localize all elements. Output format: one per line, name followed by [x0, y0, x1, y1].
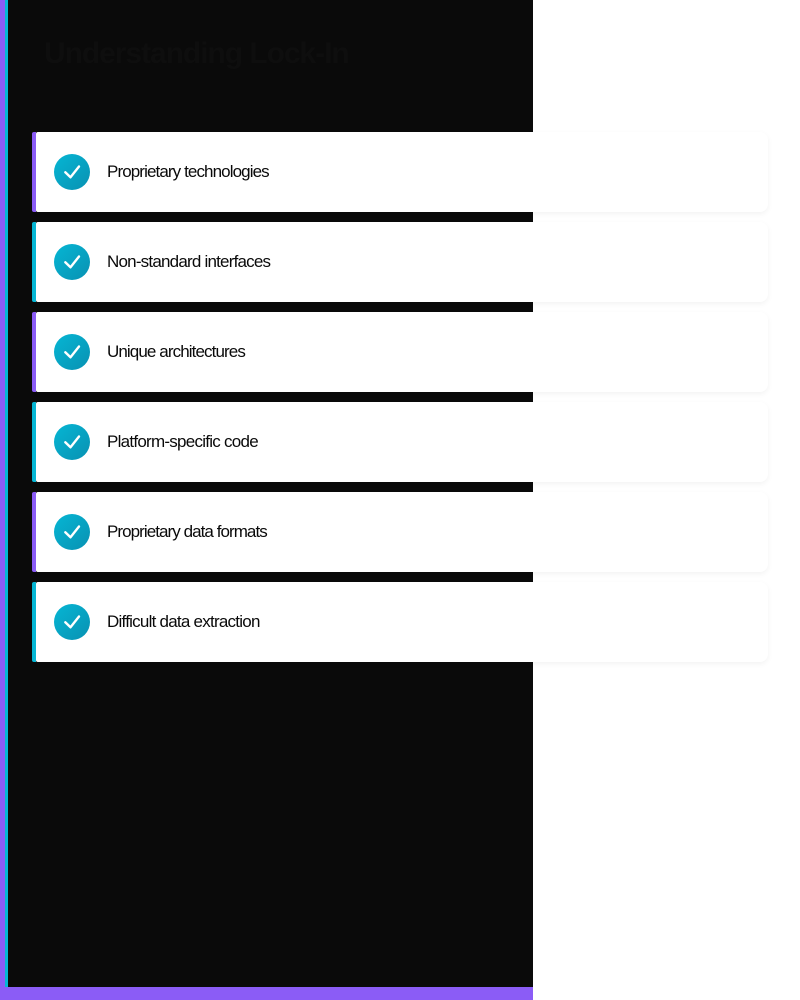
label: Difficult data extraction [107, 612, 260, 631]
card: unique architectures [32, 312, 760, 392]
label: Unique architectures [107, 342, 245, 361]
icon: check [54, 334, 90, 370]
icon: check [54, 244, 90, 280]
label: Proprietary data formats [107, 522, 267, 541]
card: proprietary data formats [32, 492, 760, 572]
icon: check [54, 604, 90, 640]
card: non-standard interfaces [32, 222, 760, 302]
bottom accent bar [0, 987, 533, 1000]
icon: check [54, 424, 90, 460]
icon: check [54, 154, 90, 190]
label: Platform-specific code [107, 432, 258, 451]
left accent stripe: cyan [5, 0, 8, 987]
left accent stripe: purple [0, 0, 5, 1000]
panel: dark background [0, 0, 533, 1000]
card: difficult data extraction [32, 582, 760, 662]
card: proprietary technologies [32, 132, 760, 212]
icon: check [54, 514, 90, 550]
card: platform-specific code [32, 402, 760, 482]
label: Proprietary technologies [107, 162, 269, 181]
label: Non-standard interfaces [107, 252, 270, 271]
title: Understanding Lock-In [44, 37, 349, 70]
